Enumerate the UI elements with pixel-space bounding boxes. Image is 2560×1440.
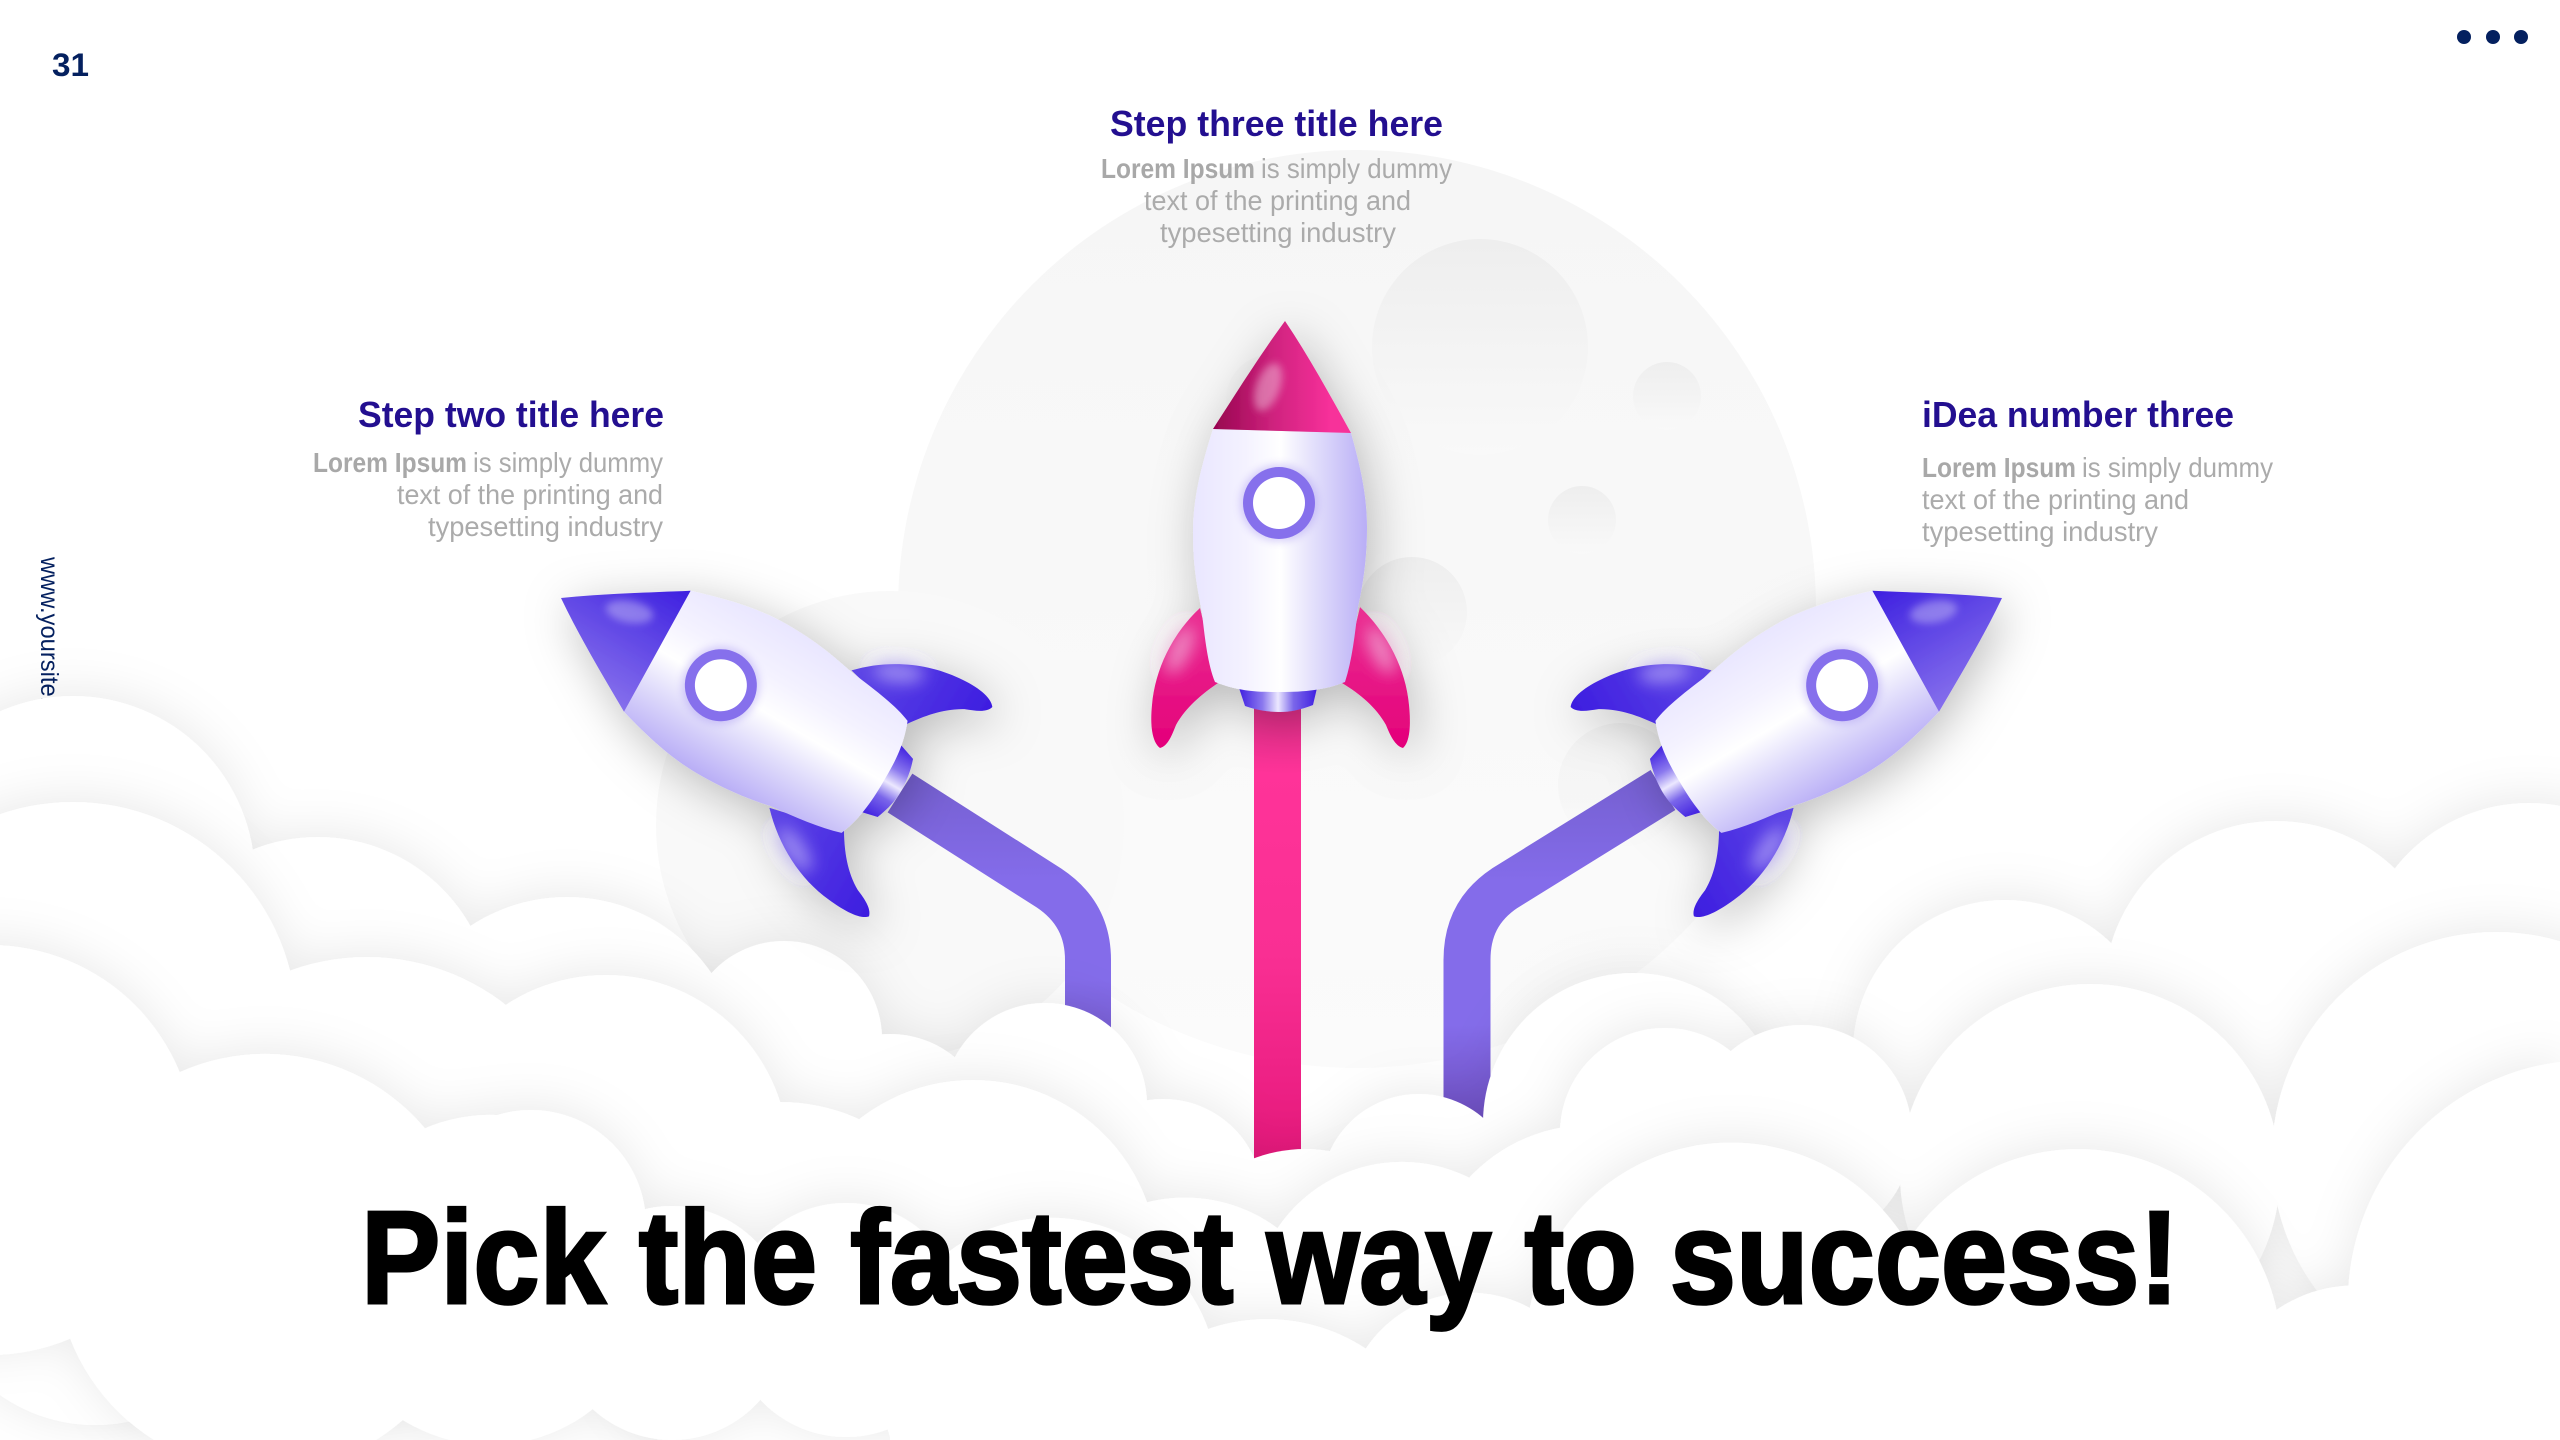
heading: iDea number three [1922,394,2234,435]
rocket: center pink [1151,321,1410,748]
window [1240,464,1318,542]
exhaust trail: right purple [1467,790,1663,1150]
body: is simply dummy [473,447,663,478]
right fin [1342,607,1410,748]
clouds: front layer [0,945,2560,1440]
moon with craters [656,150,1816,1068]
body [1193,429,1367,692]
body: typesetting industry [428,511,663,542]
exhaust trail: left purple [900,793,1088,1120]
nose [1213,321,1351,433]
body: Lorem Ipsum [1101,153,1255,184]
body: text of the printing and [1144,185,1411,216]
heading: Step two title here [358,394,664,435]
icon: menu dots [2457,30,2528,44]
rocket: right purple [1566,483,2065,922]
exhaust trail: center pink [1254,700,1301,1170]
body: typesetting industry [1922,516,2158,547]
engine [1239,688,1317,712]
body: typesetting industry [1160,217,1396,248]
main title: Pick the fastest way to success! [361,1184,2179,1331]
clouds: back layer [0,696,2560,1435]
fin highlights [1160,622,1401,678]
body [1101,153,1452,248]
body [1922,452,2273,547]
rocket: left purple [498,483,997,922]
step two text [313,394,664,542]
body: is simply dummy [2082,452,2273,483]
body: text of the printing and [397,479,663,510]
clouds: bottom fill [890,1380,2560,1440]
website url: www.yoursite.com [35,556,63,748]
heading: Step three title here [1110,103,1443,144]
clouds: middle layer [0,802,2560,1440]
body [313,447,663,542]
left fin [1151,608,1218,748]
body: Lorem Ipsum [1922,452,2076,483]
idea number three text [1922,394,2273,547]
nose highlight [1248,359,1288,415]
step three text [1101,103,1452,248]
body: Lorem Ipsum [313,447,467,478]
body: is simply dummy [1261,153,1452,184]
body: text of the printing and [1922,484,2189,515]
page number: 31 [52,47,89,83]
